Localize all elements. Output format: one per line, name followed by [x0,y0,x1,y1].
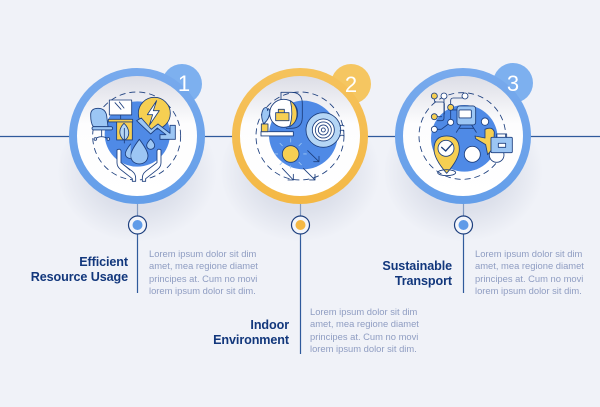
timeline axis [0,136,600,354]
text block 3: lorem ipsum dolor sit dim. [475,285,582,296]
heading: Sustainable Transport [382,259,452,288]
heading: Sustainable Transport: Sustainable [382,259,452,273]
number 2: 2 [345,72,357,97]
text block 1: amet, mea regione diamet [149,260,258,271]
step 1 circle [57,64,217,242]
text block 1: Lorem ipsum dolor sit dim [149,248,256,259]
heading: Efficient Resource Usage: Efficient [79,255,128,269]
step 3 circle [383,63,543,242]
text block 2: lorem ipsum dolor sit dim. [310,343,417,354]
text block 2: amet, mea regione diamet [310,318,419,329]
text block 3 [475,248,584,296]
number 1: 1 [178,71,190,96]
heading: Indoor Environment: Environment [213,333,289,347]
text block 2: principes at. Cum no movi [310,331,418,342]
text block 3: principes at. Cum no movi [475,273,583,284]
marker 3 [454,216,472,234]
marker 2 [292,216,310,234]
number 3: 3 [507,71,519,96]
heading: Indoor Environment: Indoor [250,318,289,332]
text block 1 [149,248,258,296]
heading: Sustainable Transport: Transport [395,274,452,288]
text block 1: lorem ipsum dolor sit dim. [149,285,256,296]
heading: Efficient Resource Usage: Resource Usage [31,270,128,284]
icon: resources [91,92,181,181]
text block 3: Lorem ipsum dolor sit dim [475,248,582,259]
text block 2: Lorem ipsum dolor sit dim [310,306,417,317]
text block 1: principes at. Cum no movi [149,273,257,284]
icon: sustainable transport [419,93,512,179]
marker 1 [128,216,146,234]
icon: indoor environment [256,92,344,180]
heading: Efficient Resource Usage [31,255,128,284]
step 2 circle [220,64,380,242]
text block 3: amet, mea regione diamet [475,260,584,271]
heading: Indoor Environment [213,318,289,347]
text block 2 [310,306,419,354]
